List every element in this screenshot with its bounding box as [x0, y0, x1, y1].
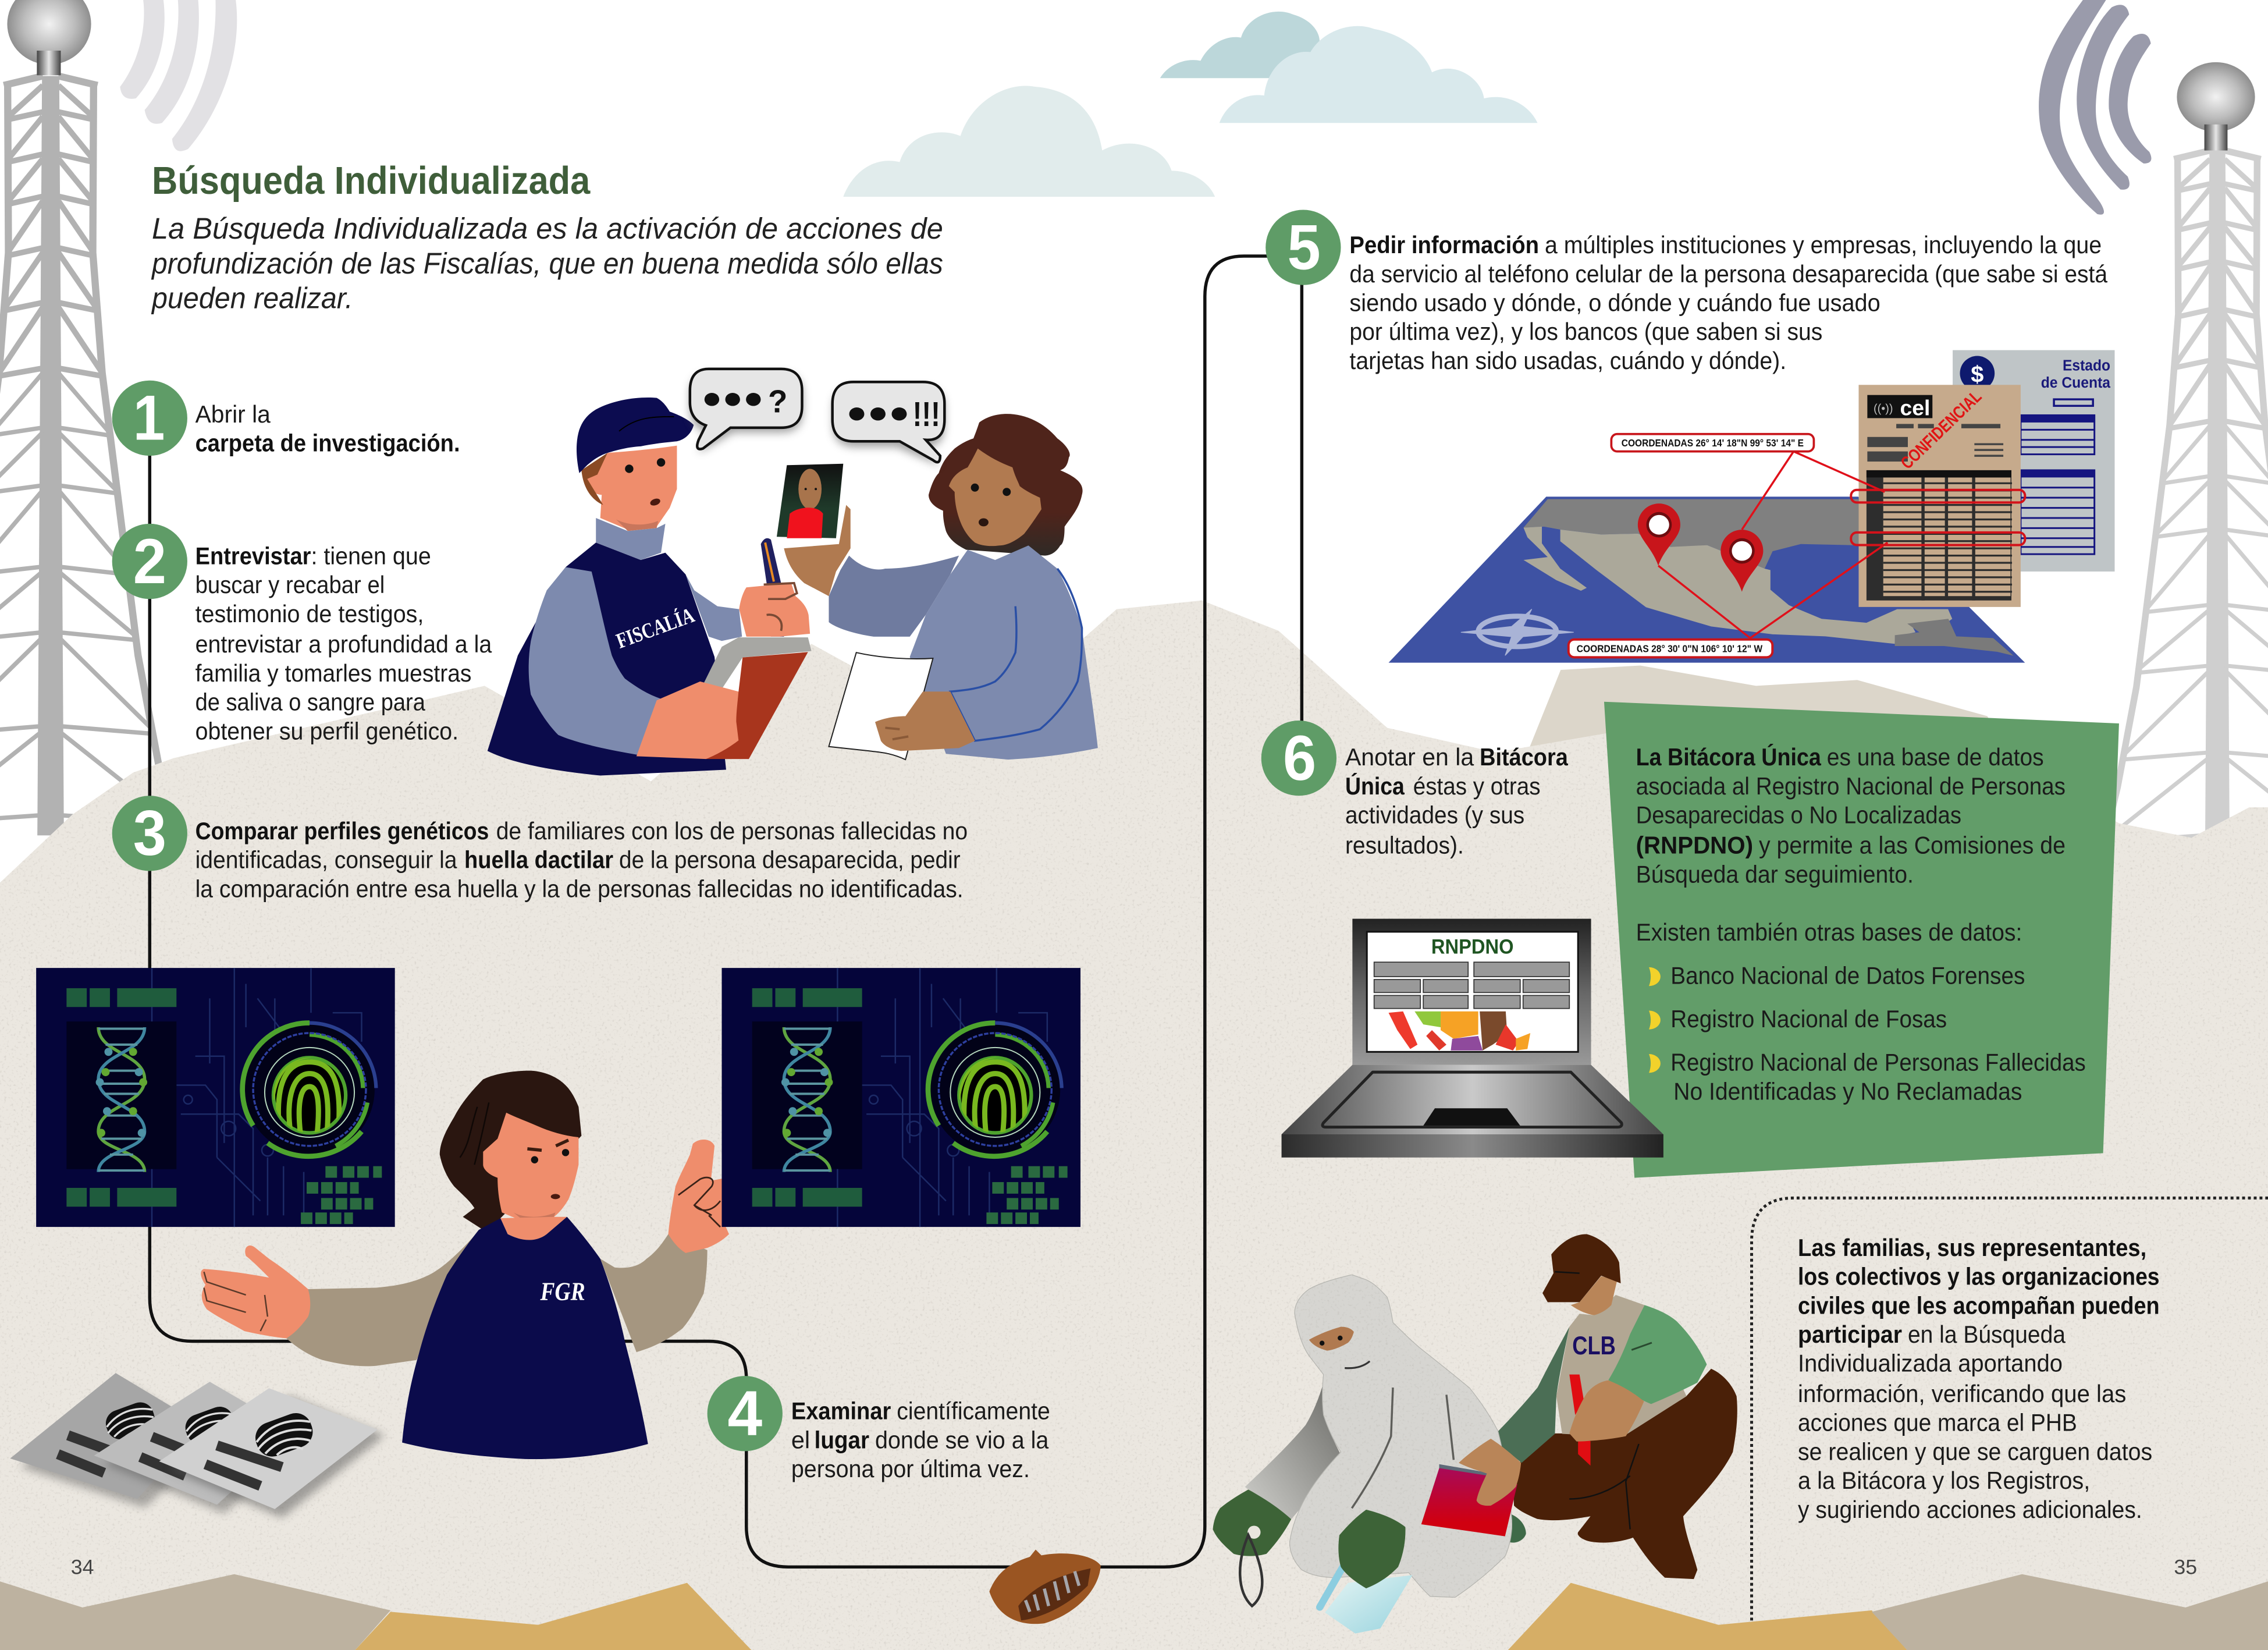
- panel: Bitácora Única: Banco Nacional de Datos Forenses: [1670, 962, 2025, 989]
- step 5 text: por última vez), y los bancos (que saben si sus: [1349, 318, 1822, 345]
- step 6 text: resultados).: [1345, 832, 1464, 859]
- left hand: [201, 1246, 310, 1339]
- step 1 text: [195, 401, 460, 457]
- coordinates label: south: [1569, 640, 1772, 657]
- bank statement document: [1953, 350, 2114, 572]
- FISCALIA label: FISCALÍA: [613, 603, 698, 654]
- step 3 text: la comparación entre esa huella y la de personas fallecidas no identificadas.: [195, 875, 964, 902]
- map of Mexico: [1389, 496, 2025, 663]
- step 5 text: [1349, 232, 2107, 374]
- step 6 text: Única: [1345, 773, 1405, 800]
- bottom mountain: left grey: [0, 1574, 390, 1650]
- face opening: [1309, 1327, 1354, 1351]
- step 2 text: de saliva o sangre para: [195, 689, 425, 716]
- illustration: forensic worker in white suit: [1213, 1275, 1512, 1634]
- red notebook and hand: [1421, 1439, 1521, 1537]
- Baja California: [1523, 527, 1587, 591]
- step 6 badge: 6: [1283, 723, 1316, 794]
- signal arcs: right tower: [2039, 0, 2151, 215]
- woman face: [949, 449, 1041, 546]
- step 3 text: de la persona desaparecida, pedir: [619, 847, 961, 874]
- woman lower hand: [875, 691, 975, 751]
- panel: families participation, dotted frame: participar: [1798, 1321, 1902, 1348]
- woman body: [910, 545, 1098, 760]
- pin 2: [1720, 530, 1763, 592]
- step 2 text: testimonio de testigos,: [195, 601, 424, 627]
- bottom mountain: right gold: [1507, 1583, 1908, 1650]
- glove 2: [1338, 1510, 1405, 1588]
- speech bubble: question: ●●●: [702, 381, 764, 415]
- panel: families participation, dotted frame: se realicen y que se carguen datos: [1798, 1438, 2152, 1465]
- tower: left: [0, 0, 183, 867]
- man hair: [581, 453, 607, 505]
- step 3 text: de familiares con los de personas fallecidas no: [496, 818, 968, 844]
- panel: Bitácora Única: es una base de datos: [1827, 744, 2044, 771]
- United States area: [1523, 499, 1866, 569]
- panel: Bitácora Única: (RNPDNO): [1636, 832, 1753, 859]
- step 5 text: da servicio al teléfono celular de la persona desaparecida (que sabe si está: [1349, 261, 2107, 288]
- gloved hand behind book: [1509, 1513, 1526, 1543]
- panel: families participation, dotted frame: Individualizada aportando: [1798, 1350, 2063, 1377]
- man cap: [577, 398, 694, 473]
- compass rose: [1461, 609, 1574, 655]
- panel: families participation, dotted frame: a la Bitácora y los Registros,: [1798, 1467, 2090, 1494]
- step 4 text: [791, 1398, 1050, 1482]
- coordinates label: north: [1611, 434, 1814, 452]
- panel: families participation, dotted frame: en la Búsqueda: [1908, 1321, 2066, 1348]
- step 6 badge: [1261, 721, 1336, 796]
- coordinates label: south: COORDENADAS 28° 30' 0"N 106° 10' 12" W: [1577, 643, 1763, 655]
- torso: [402, 1217, 648, 1459]
- confidential stamp: CONFIDENCIAL: [1897, 387, 1985, 473]
- step 1 badge: [112, 381, 187, 456]
- face: [483, 1113, 578, 1224]
- panel: Bitácora Única: Registro Nacional de Personas Fallecidas: [1670, 1049, 2086, 1076]
- bank statement document: Estado: [2063, 356, 2110, 374]
- CLB label: CLB: [1572, 1331, 1616, 1360]
- step 6 text: actividades (y sus: [1345, 802, 1524, 829]
- dark green arm: [1491, 1327, 1569, 1463]
- laptop RNPDNO: [1282, 919, 1663, 1158]
- sleeve: [1245, 1383, 1341, 1519]
- bank statement document: de Cuenta: [2041, 374, 2110, 391]
- sample cup: [1325, 1575, 1413, 1634]
- laptop RNPDNO: RNPDNO: [1431, 935, 1514, 958]
- notebook spine: [691, 637, 812, 716]
- coordinates label: north: COORDENADAS 26° 14' 18"N 99° 53' 14" E: [1622, 437, 1804, 449]
- woman hand holding photo: [784, 505, 851, 596]
- panel: Bitácora Única: asociada al Registro Nacional de Personas: [1636, 773, 2066, 800]
- step 3 text: identificadas, conseguir la: [195, 847, 457, 874]
- monitor: right: [721, 968, 1080, 1227]
- speech bubble: question: [690, 369, 803, 453]
- cloud: left: [843, 86, 1215, 197]
- step 3 badge: 3: [133, 798, 166, 869]
- pants: [1514, 1369, 1737, 1579]
- intro text: pueden realizar.: [151, 282, 353, 315]
- pin 1: [1638, 503, 1680, 566]
- step 5 text: Pedir información: [1349, 232, 1539, 258]
- step 2 text: Entrevistar: [195, 543, 311, 570]
- step 6 text: [1345, 744, 1569, 859]
- illustration: investigator and relative: [488, 398, 1098, 775]
- step 3 text: huella dactilar: [464, 847, 613, 874]
- illustration: FGR specialist: [201, 1071, 729, 1459]
- panel: Bitácora Única: Desaparecidas o No Localizadas: [1636, 802, 1961, 829]
- speech bubble: exclamation: !!!: [913, 395, 940, 434]
- speech bubble: exclamation: [833, 382, 944, 466]
- arm: viewer left: [286, 1234, 476, 1366]
- step 2 badge: [112, 524, 187, 599]
- glove 1: [1213, 1489, 1291, 1556]
- suit body: [1289, 1275, 1512, 1598]
- FGR label: FGR: [540, 1277, 585, 1306]
- intro text: profundización de las Fiscalías, que en buena medida sólo ellas: [151, 247, 943, 280]
- measuring loop: [1240, 1535, 1262, 1606]
- sheet of paper: [829, 652, 933, 760]
- tower: right: [2095, 62, 2268, 882]
- step 6 text: Bitácora: [1480, 744, 1569, 771]
- step 6 text: éstas y otras: [1413, 773, 1541, 800]
- man face: [587, 446, 677, 530]
- back mountains: [1504, 666, 2098, 926]
- panel: families participation, dotted frame: los colectivos y las organizaciones: [1798, 1264, 2160, 1290]
- phone records document: [1858, 385, 2021, 607]
- pen: [761, 538, 784, 637]
- step 2 text: buscar y recabar el: [195, 572, 385, 598]
- right hand: [669, 1140, 729, 1253]
- panel: Bitácora Única: [1604, 702, 2119, 1178]
- step 5 badge: 5: [1288, 212, 1321, 283]
- panel: Bitácora Única: La Bitácora Única: [1636, 744, 1822, 771]
- bottom mountain: left gold: [354, 1583, 752, 1650]
- Central America: [1895, 619, 2013, 656]
- woman raised arm: [829, 556, 959, 637]
- title: Búsqueda Individualizada: [152, 159, 591, 203]
- panel: families participation, dotted frame: Las familias, sus representantes,: [1798, 1234, 2146, 1261]
- panel: Bitácora Única: Registro Nacional de Fosas: [1670, 1006, 1947, 1032]
- signal arcs: left tower: [120, 0, 237, 151]
- step 3 badge: [112, 796, 187, 871]
- step 5 text: tarjetas han sido usadas, cuándo y dónde).: [1349, 347, 1786, 374]
- record highlight: top: [1851, 490, 2025, 502]
- shoe print fragment: [989, 1549, 1101, 1624]
- step 4 text: Examinar: [791, 1398, 891, 1425]
- man hand on notebook: [637, 682, 738, 759]
- panel: Bitácora Única: y permite a las Comisiones de: [1759, 832, 2066, 859]
- step 2 text: obtener su perfil genético.: [195, 718, 458, 744]
- step 4 text: el: [791, 1427, 810, 1453]
- man hand with pen: [739, 583, 810, 637]
- step 4 text: científicamente: [897, 1398, 1050, 1425]
- step 2 text: familia y tomarles muestras: [195, 660, 471, 687]
- step 1 badge: 1: [133, 383, 165, 454]
- sleeve: [1608, 1305, 1707, 1404]
- vest: [488, 542, 726, 775]
- textured ground and mountains: [0, 601, 2268, 1650]
- speech bubble: question: ?: [768, 384, 787, 420]
- step 4 text: persona por última vez.: [791, 1456, 1030, 1482]
- step 2 text: entrevistar a profundidad a la: [195, 631, 492, 658]
- notebook cover: [706, 652, 808, 759]
- hair: [440, 1071, 581, 1230]
- step 4 badge: 4: [727, 1378, 762, 1449]
- record highlight: bottom: [1851, 533, 2025, 545]
- red coordinate connector lines: [1658, 452, 1887, 638]
- bank statement document: $: [1971, 361, 1983, 387]
- vest: [1556, 1295, 1687, 1437]
- hat: [1542, 1234, 1621, 1302]
- panel: families participation, dotted frame: y sugiriendo acciones adicionales.: [1798, 1496, 2142, 1523]
- step 5 badge: [1265, 210, 1341, 285]
- panel: families participation, dotted frame: acciones que marca el PHB: [1798, 1410, 2077, 1436]
- step 4 badge: [708, 1376, 783, 1451]
- panel: families participation, dotted frame: civiles que les acompañan pueden: [1798, 1292, 2160, 1319]
- page number 34: 34: [71, 1556, 94, 1579]
- step 3 text: [195, 818, 968, 902]
- intro text: [151, 212, 943, 315]
- zipper lines: [1352, 1388, 1453, 1508]
- photograph: [773, 460, 847, 544]
- man collar: [596, 518, 666, 560]
- panel: Bitácora Única: Búsqueda dar seguimiento.: [1636, 861, 1914, 888]
- step 2 text: : tienen que: [311, 543, 431, 570]
- Mexican mainland: [1560, 530, 1952, 644]
- step 1 text: Abrir la: [195, 401, 271, 428]
- monitor: left: [36, 968, 395, 1227]
- woman hair: [929, 414, 1083, 556]
- step 1 text: carpeta de investigación.: [195, 430, 460, 457]
- step 3 text: Comparar perfiles genéticos: [195, 818, 489, 844]
- neck: [500, 1217, 567, 1240]
- speech bubble: exclamation: ●●●: [846, 396, 910, 430]
- step 4 text: donde se vio a la: [875, 1427, 1048, 1453]
- step 5 text: siendo usado y dónde, o dónde y cuándo fue usado: [1349, 289, 1880, 316]
- panel: Bitácora Única: Existen también otras bases de datos:: [1636, 919, 2022, 946]
- cloud: back: [1160, 12, 1354, 78]
- phone records document: cel: [1900, 395, 1930, 420]
- fingerprint documents: [10, 1373, 385, 1518]
- red marker: [1569, 1375, 1591, 1466]
- forearm: [1569, 1381, 1644, 1442]
- illustration: CLB searcher: [1491, 1234, 1737, 1579]
- bottom mountain: right grey: [1872, 1574, 2268, 1650]
- intro text: La Búsqueda Individualizada es la activación de acciones de: [152, 212, 943, 245]
- step 6 text: Anotar en la: [1345, 744, 1474, 771]
- man arm: viewer right: [685, 574, 742, 641]
- arm: viewer right: [600, 1234, 708, 1352]
- step 4 text: lugar: [815, 1427, 869, 1453]
- step 2 text: [195, 543, 492, 744]
- timeline connector line: [150, 256, 1302, 1567]
- phone records document: ((•)): [1874, 403, 1893, 416]
- man arm: viewer left: [529, 567, 661, 757]
- panel: families participation, dotted frame: información, verificando que las: [1798, 1381, 2126, 1407]
- panel: Bitácora Única: No Identificadas y No Reclamadas: [1673, 1078, 2022, 1105]
- page number 35: 35: [2174, 1556, 2197, 1579]
- step 2 badge: 2: [133, 526, 166, 597]
- panel: families participation, dotted frame: [1752, 1198, 2268, 1620]
- face: [1571, 1276, 1617, 1315]
- step 5 text: a múltiples instituciones y empresas, incluyendo la que: [1545, 232, 2102, 258]
- cloud: front: [1220, 26, 1538, 123]
